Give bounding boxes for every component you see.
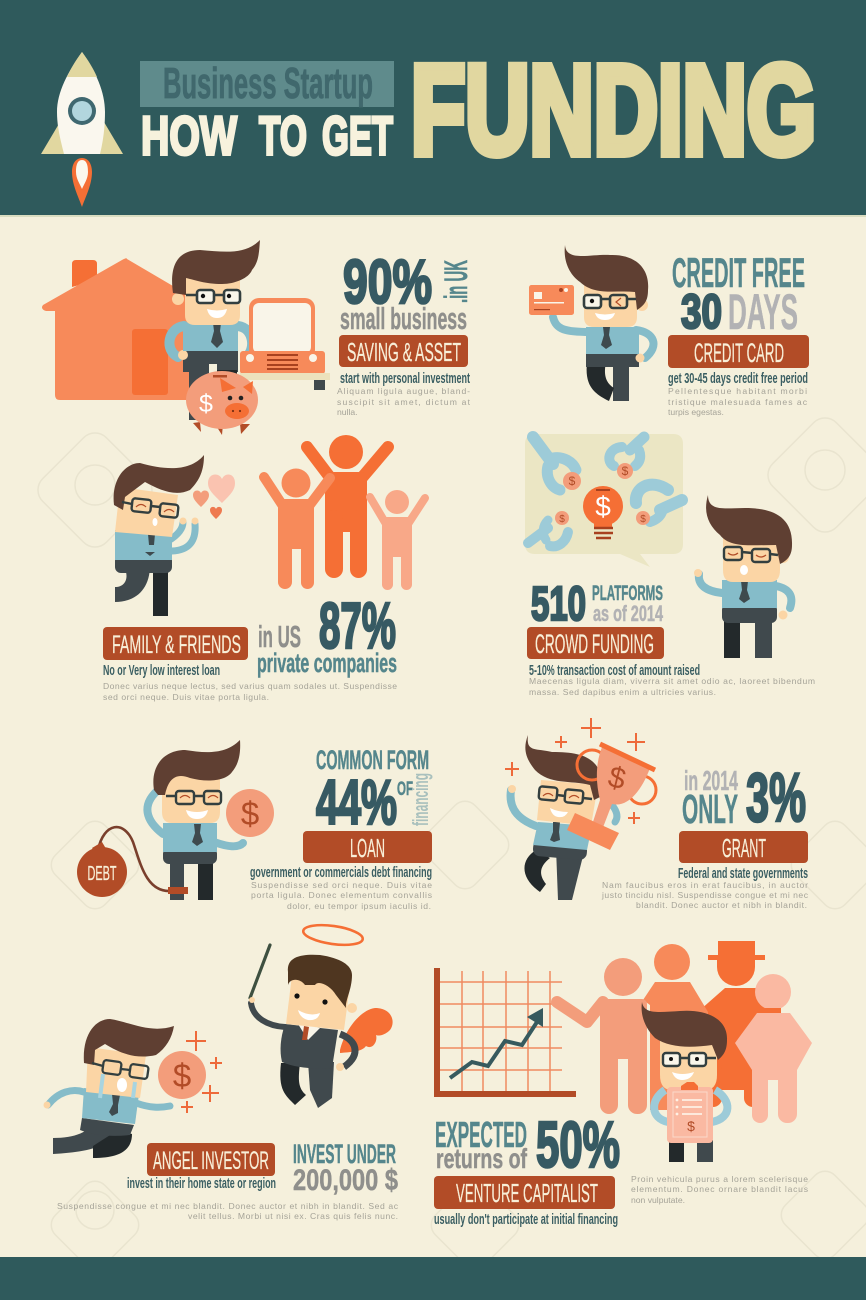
description text <box>251 880 432 911</box>
label: grant: GRANT <box>722 833 766 863</box>
panel: grant <box>505 718 809 910</box>
panel: venture capitalist <box>434 941 812 1228</box>
icon: dollar coin: $ <box>241 795 259 832</box>
description text: porta ligula. Donec elementum convallis <box>251 890 432 900</box>
label: crowd funding <box>527 627 664 659</box>
stat: 44% common form: COMMON FORM <box>316 745 429 775</box>
subheading: home state: invest in their home state or region <box>127 1176 276 1192</box>
icon: businessman with trophy <box>505 718 656 900</box>
icon: wing <box>340 1008 393 1053</box>
panel: credit card <box>529 245 809 417</box>
label: saving and asset <box>339 335 468 367</box>
description text <box>668 386 808 417</box>
stat: 87% in US: in US <box>258 619 301 654</box>
description text: turpis egestas. <box>668 407 724 417</box>
stat: 44% common form: financing <box>408 773 433 826</box>
stat: 87% in US: 87% <box>319 589 396 662</box>
stat: 87% in US <box>257 589 397 678</box>
stat: only 3% in 2014: in 2014 <box>684 765 738 796</box>
stat: 510 platforms: as of 2014 <box>593 601 663 626</box>
icon: hands dropping coins <box>528 437 682 546</box>
description text: Nam faucibus eros in erat faucibus, in auctor <box>602 880 808 890</box>
icon: trophy <box>567 744 656 850</box>
icon: crying businessman with coin <box>44 1019 222 1158</box>
stat: 44% common form: OF <box>397 779 413 800</box>
subheading: debt financing: government or commercials debt financing <box>250 865 432 881</box>
label: saving and asset: SAVING & ASSET <box>347 337 461 367</box>
icon: clipboard: $ <box>687 1118 695 1134</box>
description text: Suspendisse congue et mi nec blandit. Donec auctor et nibh in blandit. Sed ac <box>57 1201 399 1211</box>
stat: expected returns 50%: returns of <box>436 1143 527 1174</box>
stat: only 3% in 2014 <box>682 759 806 836</box>
speech bubble with hands and coins <box>525 434 683 567</box>
speech bubble with hands and coins: $ <box>569 474 576 488</box>
stat: credit free 30 days <box>672 249 805 340</box>
stat: 90% in UK: .in UK <box>438 260 474 303</box>
description text: Maecenas ligula diam, viverra sit amet odio ac, laoreet bibendum <box>529 676 815 686</box>
icon: businessman with hearts <box>114 455 235 616</box>
label: loan <box>303 831 432 863</box>
header band <box>0 0 866 217</box>
stat: only 3% in 2014: ONLY <box>682 786 738 832</box>
description text: dolor, eu tempor ipsum iaculis id. <box>287 901 431 911</box>
stat: invest under 200,000: INVEST UNDER <box>293 1139 396 1169</box>
panel: saving and asset <box>42 240 474 435</box>
label: venture capitalist <box>434 1176 615 1209</box>
subheading: low interest loan: No or Very low interest loan <box>103 663 220 679</box>
icon: piggy bank: $ <box>199 390 213 418</box>
line chart <box>434 968 576 1097</box>
description text: Aliquam ligula augue, bland- <box>337 386 470 396</box>
icon: magic wand <box>250 945 270 998</box>
description text: sed orci neque. Duis vitae porta ligula. <box>103 692 269 702</box>
icon: businessman chained to debt bomb <box>77 740 274 900</box>
icon: dollar light bulb <box>583 486 623 538</box>
description text: Proin vehicula purus a lorem scelerisque <box>631 1174 808 1184</box>
panel: family and friends <box>103 435 425 702</box>
panel: loan <box>77 740 433 911</box>
stat: 510 platforms: PLATFORMS <box>592 582 663 605</box>
panel: angel investor <box>44 922 399 1221</box>
footer band <box>0 1257 866 1300</box>
icon: businessman with glasses <box>169 240 260 420</box>
stat: 44% common form: 44% <box>316 768 397 838</box>
speech bubble with hands and coins: $ <box>640 514 646 525</box>
subtitle: Business Startup <box>140 59 394 108</box>
title: how to get: HOW <box>141 104 237 166</box>
stat: expected returns 50%: 50% <box>536 1108 620 1181</box>
icon: businessman holding credit card <box>529 245 654 401</box>
description text: nulla. <box>337 407 358 417</box>
icon: dollar coin <box>226 789 274 837</box>
label: angel investor <box>147 1143 275 1176</box>
stat: 510 platforms <box>531 578 663 631</box>
subheading: transaction cost: 5-10% transaction cost of amount raised <box>529 663 700 679</box>
icon: rocket <box>41 52 123 207</box>
icon: trophy: $ <box>605 760 629 797</box>
description text <box>601 880 809 910</box>
icon: piggy bank <box>186 371 258 435</box>
description text <box>103 681 397 702</box>
description text: suscipit sit amet, dictum at <box>337 397 471 407</box>
label: family and friends <box>103 627 248 660</box>
label: credit card <box>668 335 809 368</box>
stat: 510 platforms: 510 <box>531 578 586 631</box>
label: angel investor: ANGEL INVESTOR <box>153 1147 269 1175</box>
stat: expected returns 50%: EXPECTED <box>435 1114 527 1155</box>
title: how to get <box>141 104 393 166</box>
icon: credit card <box>529 285 574 315</box>
subtitle: Business Startup: Business Startup <box>163 59 373 108</box>
label: crowd funding: CROWD FUNDING <box>535 629 654 659</box>
description text: massa. Sed dapibus enim a ultricies varius. <box>529 687 716 697</box>
stat: 87% in US: private companies <box>257 648 397 678</box>
speech bubble with hands and coins: $ <box>622 464 629 478</box>
description text: elementum. Donec ornare blandit lacus <box>631 1184 808 1194</box>
icon: halo <box>302 922 364 948</box>
icon: angel investor character <box>249 922 393 1108</box>
icon: debt bomb <box>77 827 188 897</box>
icon: house <box>42 258 190 400</box>
icon: dollar light bulb: $ <box>595 491 611 522</box>
stat: invest under 200,000: 200,000 $ <box>293 1164 398 1197</box>
description text <box>57 1201 399 1221</box>
description text: justo tincidu nisl. Suspendisse congue et mi nec <box>601 890 809 900</box>
icon: debt bomb: DEBT <box>88 863 116 885</box>
icon: presenting businessman <box>694 495 792 658</box>
stat: only 3% in 2014: 3% <box>746 759 806 836</box>
stat: credit free 30 days: DAYS <box>728 284 798 340</box>
icon: sparkles <box>505 718 645 824</box>
subheading: initial financing: usually don't participate at initial financing <box>434 1212 618 1228</box>
description text: Donec varius neque lectus, sed varius quam sodales ut. Suspendisse <box>103 681 397 691</box>
title: how to get: GET <box>322 104 393 166</box>
description text: tristique malesuada fames ac <box>668 397 808 407</box>
icon: car <box>240 298 330 390</box>
icon: clipboard <box>667 1082 713 1143</box>
panel: crowd funding <box>525 434 815 697</box>
description text <box>631 1174 808 1205</box>
label: grant <box>679 831 808 863</box>
icon: hearts <box>193 474 235 519</box>
description text: non vulputate. <box>631 1195 685 1205</box>
description text: blandit. Donec auctor et nibh in blandit. <box>636 900 807 910</box>
stat: 90% in UK: small business <box>340 301 467 336</box>
label: family and friends: FAMILY & FRIENDS <box>112 631 241 659</box>
stat: invest under 200,000 <box>293 1139 398 1197</box>
description text: Suspendisse sed orci neque. Duis vitae <box>251 880 432 890</box>
stat: expected returns 50% <box>435 1108 620 1181</box>
stat: credit free 30 days: 30 <box>681 286 722 339</box>
description text: velit tellus. Morbi ut nisi ex. Cras quis felis nunc. <box>188 1211 398 1221</box>
subheading: personal investment: start with personal investment <box>340 370 470 387</box>
icon: family group <box>264 435 425 590</box>
icon: investor group <box>557 941 812 1123</box>
label: venture capitalist: VENTURE CAPITALIST <box>456 1178 598 1208</box>
description text: Pellentesque habitant morbi <box>668 386 807 396</box>
description text <box>337 386 471 417</box>
speech bubble with hands and coins: $ <box>559 514 565 525</box>
icon: businessman with clipboard <box>642 1002 727 1162</box>
title: how to get: TO <box>259 104 307 166</box>
stat: 90% in UK: 90% <box>343 248 432 317</box>
description text <box>529 676 815 697</box>
icon: dollar coin with sparkles <box>158 1031 222 1113</box>
label: loan: LOAN <box>350 833 385 863</box>
icon: dollar coin with sparkles: $ <box>173 1057 191 1094</box>
